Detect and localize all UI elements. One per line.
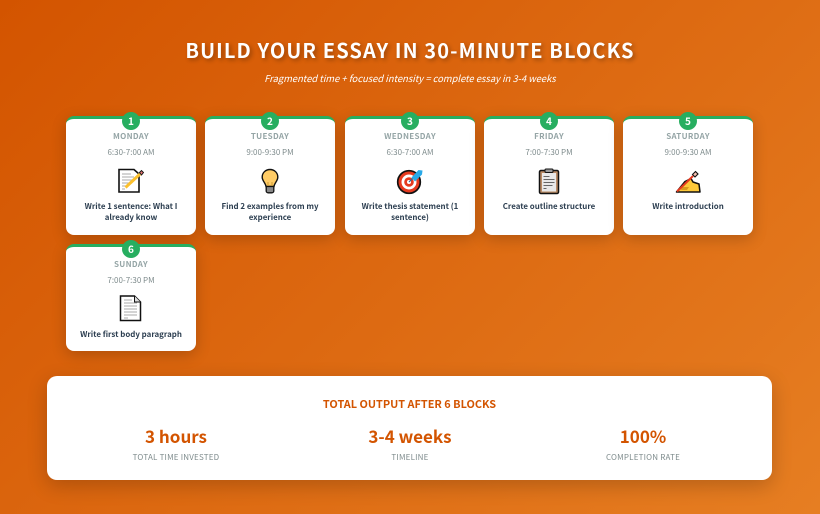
card 5: Saturday [623, 116, 753, 235]
icon: light bulb [262, 168, 278, 194]
step badge 2 [261, 112, 279, 130]
day label: TUESDAY [251, 131, 289, 142]
step badge 5 [679, 112, 697, 130]
day label: SATURDAY [666, 131, 710, 142]
title: BUILD YOUR ESSAY IN 30-MINUTE BLOCKS [185, 35, 635, 64]
card 1: Monday [66, 116, 196, 235]
icon: target with dart [396, 170, 422, 194]
step badge 5: 5 [685, 113, 691, 128]
step badge 4 [540, 112, 558, 130]
time label: 6:30-7:00 AM [107, 147, 154, 158]
time label: 7:00-7:30 PM [525, 147, 573, 158]
stat label: TOTAL TIME INVESTED [133, 452, 219, 463]
stat value: 3 hours [145, 423, 207, 448]
card 4: Friday [484, 116, 614, 235]
day label: SUNDAY [114, 259, 148, 270]
step badge 3 [401, 112, 419, 130]
step badge 6 [122, 240, 140, 258]
time label: 6:30-7:00 AM [386, 147, 434, 158]
icon: document [120, 295, 142, 322]
stat label: TIMELINE [391, 452, 429, 463]
icon: writing hand [676, 170, 701, 193]
icon: memo with pencil [118, 168, 144, 193]
task text: Write thesis statement (1 sentence) [362, 201, 458, 223]
summary heading: TOTAL OUTPUT AFTER 6 BLOCKS [323, 396, 496, 412]
stat: completion rate [606, 423, 680, 463]
task text: Find 2 examples from my experience [221, 201, 319, 223]
step badge 2: 2 [267, 113, 273, 128]
time label: 7:00-7:30 PM [107, 275, 155, 286]
step badge 1 [122, 112, 140, 130]
stat: total time [132, 423, 219, 463]
time label: 9:00-9:30 PM [246, 147, 294, 158]
stat value: 3-4 weeks [368, 423, 452, 448]
card 3: Wednesday [345, 116, 475, 235]
step badge 6: 6 [128, 241, 134, 256]
task text: Write first body paragraph [80, 329, 182, 340]
day label: FRIDAY [534, 131, 564, 142]
time label: 9:00-9:30 AM [664, 147, 712, 158]
task text: Write introduction [652, 201, 724, 212]
stat: timeline [368, 423, 452, 463]
task text: Write 1 sentence: What I already know [85, 201, 177, 223]
panel: total output summary [47, 376, 772, 480]
day label: MONDAY [113, 131, 149, 142]
card 2: Tuesday [205, 116, 335, 235]
icon: clipboard [538, 168, 560, 194]
step badge 4: 4 [546, 113, 552, 128]
step badge 1: 1 [128, 113, 134, 128]
step badge 3: 3 [407, 113, 413, 128]
stat value: 100% [620, 423, 666, 448]
day label: WEDNESDAY [384, 131, 436, 142]
subtitle: Fragmented time + focused intensity = complete essay in 3-4 weeks [264, 71, 556, 85]
stat label: COMPLETION RATE [606, 452, 680, 463]
card 6: Sunday [66, 244, 196, 351]
task text: Create outline structure [503, 201, 595, 212]
